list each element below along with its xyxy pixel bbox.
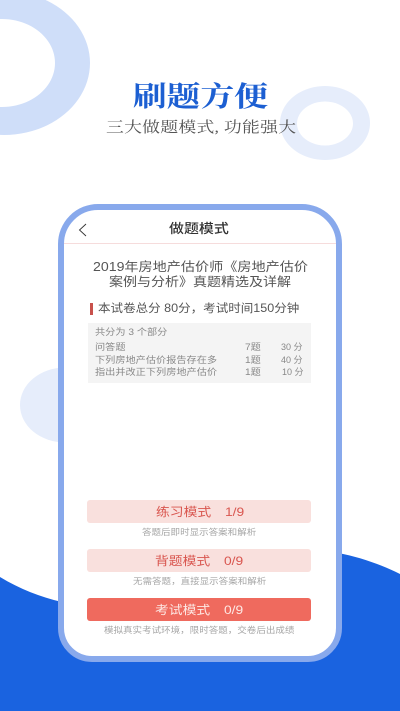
button: practice mode: 1/9: [225, 505, 244, 519]
button: exam mode: 0/9: [224, 603, 243, 617]
text: exam title: 案例与分析》真题精选及详解: [109, 275, 291, 289]
panel: phone mockup: [58, 204, 342, 662]
ring: top left: [0, 0, 90, 135]
subtitle: 三大做题模式, 功能强大: [106, 120, 296, 136]
blue wave: [0, 553, 400, 711]
heading: phone header: 做题模式: [169, 221, 229, 236]
button: memorize mode: 背题模式: [155, 554, 210, 568]
icon: red marker: [90, 303, 92, 315]
button: practice mode: [87, 500, 311, 523]
panel: exam sections: 问答题: [95, 342, 126, 352]
icon: back chevron: [78, 224, 86, 236]
ring: right: [280, 86, 370, 160]
panel: exam sections: 10 分: [282, 367, 304, 377]
button: exam mode: [87, 598, 311, 621]
panel: exam sections: 40 分: [281, 355, 303, 365]
blob: left circle: [20, 368, 110, 442]
button: memorize mode: 0/9: [224, 554, 243, 568]
caption: exam mode: 模拟真实考试环境，限时答题，交卷后出成绩: [104, 625, 294, 635]
panel: exam sections: 指出并改正下列房地产估价: [95, 367, 217, 377]
button: memorize mode: [87, 549, 311, 572]
button: practice mode: 练习模式: [156, 505, 211, 519]
panel: exam sections: 下列房地产估价报告存在多: [95, 355, 217, 365]
panel: exam sections: 1题: [245, 367, 261, 377]
panel: exam sections: 1题: [245, 355, 261, 365]
title: 刷题方便: [133, 82, 268, 113]
text: exam title: [93, 260, 308, 289]
panel: exam sections: 30 分: [281, 342, 303, 352]
caption: practice mode: 答题后即时显示答案和解析: [142, 527, 256, 537]
panel: exam sections: [88, 323, 311, 383]
panel: exam sections: 7题: [245, 342, 261, 352]
caption: memorize mode: 无需答题，直接显示答案和解析: [133, 576, 266, 586]
text: exam title: 2019年房地产估价师《房地产估价: [93, 260, 308, 274]
text: exam summary: 本试卷总分 80分，考试时间150分钟: [98, 303, 299, 315]
panel: exam sections: 共分为 3 个部分: [95, 327, 167, 337]
button: exam mode: 考试模式: [155, 603, 210, 617]
